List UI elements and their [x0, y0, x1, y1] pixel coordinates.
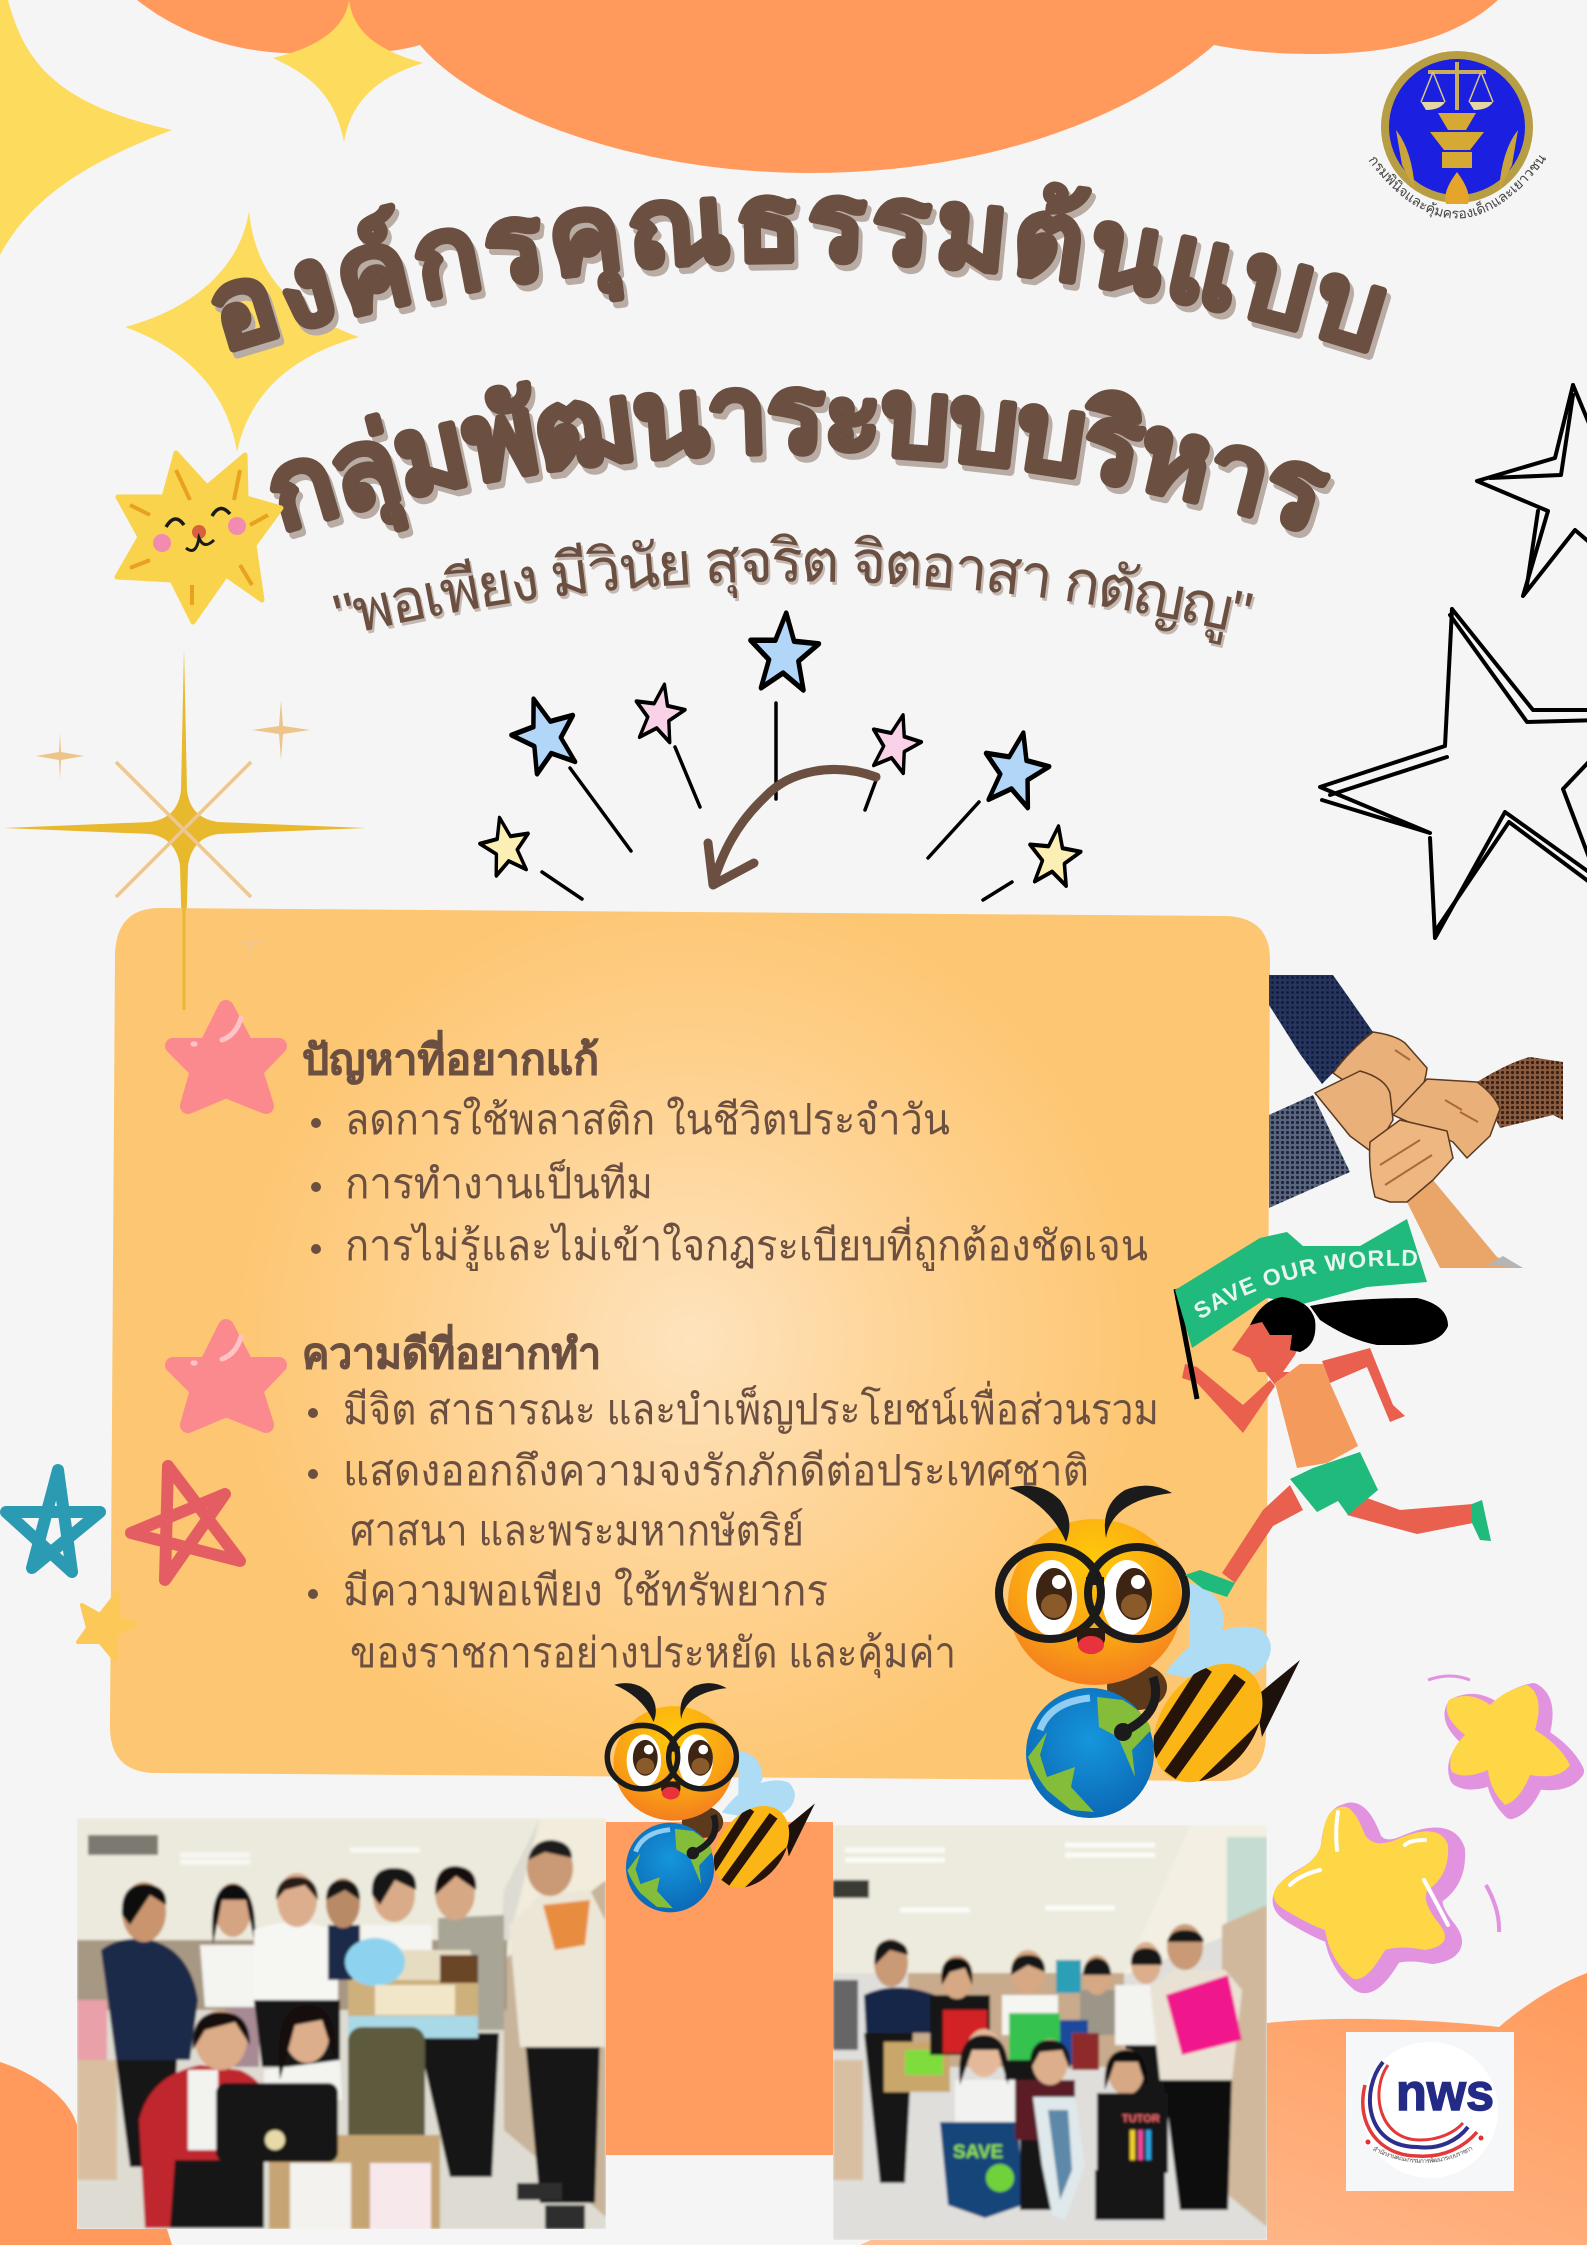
list: virtues: แสดงออกถึงความจงรักภักดีต่อประเทศชาติ: [343, 1447, 1089, 1494]
flag text: SAVE OUR WORLD: [1194, 1250, 1417, 1318]
list: virtues: มีจิต สาธารณะ และบำเพ็ญประโยชน์เพื่อส่วนรวม: [343, 1381, 1159, 1434]
list: problems: ลดการใช้พลาสติก ในชีวิตประจำวัน: [345, 1096, 950, 1143]
kneeling people with tote bags: [940, 2029, 1168, 2220]
list: problems: [311, 1096, 1148, 1271]
icon: smiling star: [117, 453, 281, 622]
star: pink left: [630, 680, 689, 744]
list: virtues: ศาสนา และพระมหากษัตริย์: [350, 1507, 804, 1554]
illustration: joined hands: [1269, 975, 1563, 1268]
bottom right orange wave: [860, 1973, 1587, 2245]
star: blue top: [748, 611, 820, 691]
list: virtues: มีความพอเพียง ใช้ทรัพยากร: [343, 1567, 828, 1614]
top orange cloud shape: [137, 0, 1498, 173]
illustration: large bee holding globe: [999, 1486, 1300, 1818]
logo: Department of Juvenile Observation and Protection: [1368, 51, 1546, 218]
subtitle values: "พอเพียง มีวินัย สุจริต จิตอาสา กตัญญู": [332, 533, 1255, 648]
title line 2: กลุ่มพัฒนาระบบบริหาร: [270, 380, 1335, 539]
gold sparkles left: [4, 648, 366, 1010]
small yellow star: [78, 1592, 135, 1660]
scribble star teal: [6, 1470, 100, 1572]
list: problems: การไม่รู้และไม่เข้าใจกฎระเบียบที่ถูกต้องชัดเจน: [345, 1217, 1148, 1271]
heading: problems to solve: ปัญหาที่อยากแก้: [302, 1030, 599, 1085]
star: yellow left: [475, 813, 535, 878]
illustration: small bee holding globe: [607, 1683, 815, 1912]
logo wordmark: nws: [1396, 2064, 1494, 2122]
bottom left orange corner: [0, 2062, 172, 2245]
illustration: girl running with flag: [1174, 1219, 1491, 1597]
standing people: [101, 1840, 605, 2229]
sparkle: yellow behind title: [125, 211, 359, 452]
scribble star red: [131, 1466, 240, 1580]
panel: main orange content card: [110, 908, 1270, 1781]
outline stars right: [1320, 385, 1587, 938]
logo caption: กรมพินิจและคุ้มครองเด็กและเยาวชน: [1368, 155, 1546, 218]
star: yellow with pink outline large: [1274, 1807, 1499, 1984]
list: virtues: [308, 1381, 1159, 1679]
arrow: curved brown: [708, 770, 876, 885]
kneeling people with tote bags: SAVE: [953, 2142, 1003, 2163]
star bullet: problems: [173, 1008, 279, 1106]
green bag: [348, 2027, 425, 2147]
sparkle: large yellow top left: [0, 0, 172, 255]
photo: team with reusable bags: [833, 1825, 1267, 2240]
sparkle: small yellow top: [273, 0, 423, 142]
star: yellow with pink outline small: [1428, 1676, 1576, 1811]
logo caption: สำนักงานคณะกรรมการพัฒนาระบบราชการ: [1373, 2146, 1472, 2163]
list: problems: การทำงานเป็นทีม: [345, 1159, 653, 1207]
firework stars with arrow: [475, 611, 1084, 900]
star: pink right: [865, 709, 927, 776]
kneeling people with bag and box: [139, 2005, 440, 2229]
star: blue left: [503, 689, 587, 778]
star: yellow right: [1025, 823, 1084, 887]
kneeling people with tote bags: TUTOR: [1122, 2113, 1160, 2125]
orange column between photos: [606, 1822, 833, 2155]
star: blue right: [977, 726, 1055, 810]
standing people: [864, 1924, 1242, 2210]
donation box with signs: [345, 1938, 478, 2038]
star bullet: virtues: [173, 1327, 279, 1425]
photo: group with donated bags: [77, 1818, 606, 2229]
title line 1: องค์กรคุณธรรมต้นแบบ: [211, 182, 1391, 360]
list: virtues: ของราชการอย่างประหยัด และคุ้มค่า: [350, 1629, 956, 1679]
heading: virtues to practice: ความดีที่อยากทำ: [302, 1324, 601, 1377]
